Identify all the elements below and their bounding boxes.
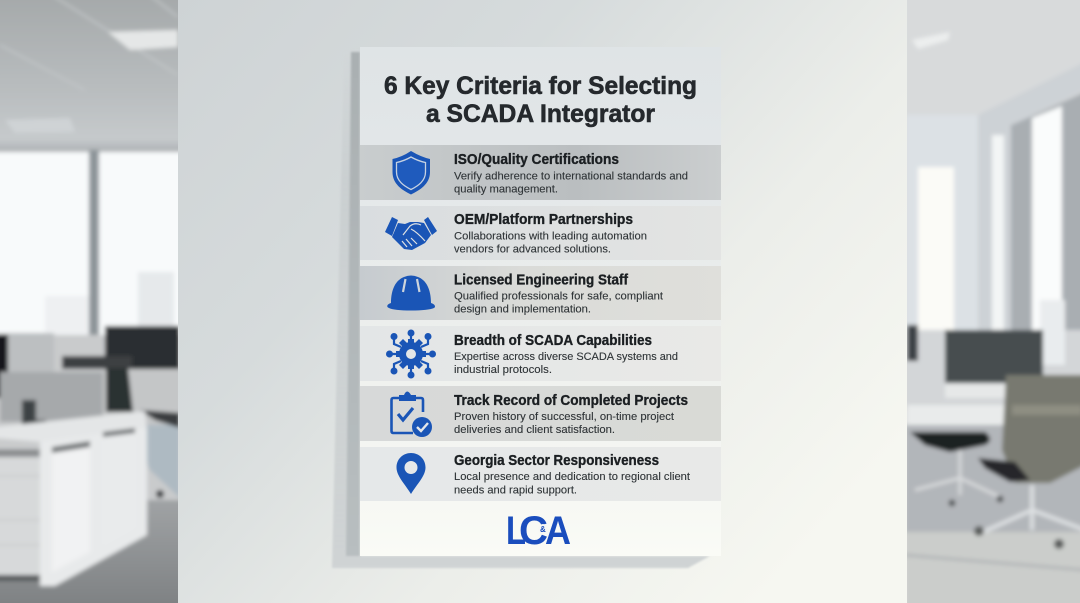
- text: Track Record of Completed Projects: Proven history of successful, on-time project: [454, 411, 674, 423]
- text: ISO/Quality Certifications: [454, 152, 688, 196]
- row: Georgia Sector Responsiveness: [360, 447, 721, 501]
- logo: LC&A: &: [540, 525, 546, 534]
- text: Breadth of SCADA Capabilities: [454, 333, 678, 376]
- text: Licensed Engineering Staff: Qualified professionals for safe, compliant: [454, 290, 663, 302]
- icon: gear network: [386, 330, 436, 378]
- icon: handshake: [385, 217, 437, 250]
- text: Georgia Sector Responsiveness: Local presence and dedication to regional client: [454, 471, 690, 483]
- text: OEM/Platform Partnerships: OEM/Platform Partnerships: [454, 212, 633, 228]
- wall: [178, 0, 907, 603]
- text: Breadth of SCADA Capabilities: industrial protocols.: [454, 364, 552, 376]
- text: Track Record of Completed Projects: [454, 393, 688, 436]
- row: Licensed Engineering Staff: [360, 266, 721, 320]
- title: a SCADA Integrator: [426, 100, 655, 128]
- background: office right side: [905, 0, 1080, 603]
- text: Georgia Sector Responsiveness: needs and rapid support.: [454, 484, 577, 496]
- text: Track Record of Completed Projects: Track Record of Completed Projects: [454, 393, 688, 409]
- row: Track Record of Completed Projects: [360, 386, 721, 441]
- infographic panel: [360, 47, 721, 556]
- text: Georgia Sector Responsiveness: Georgia Sector Responsiveness: [454, 453, 659, 469]
- row: Breadth of SCADA Capabilities: [360, 326, 721, 381]
- row: ISO/Quality Certifications: [360, 145, 721, 200]
- text: Licensed Engineering Staff: design and implementation.: [454, 304, 591, 316]
- text: Georgia Sector Responsiveness: [454, 453, 690, 496]
- text: OEM/Platform Partnerships: vendors for advanced solutions.: [454, 244, 611, 256]
- row: OEM/Platform Partnerships: [360, 206, 721, 260]
- text: Licensed Engineering Staff: Licensed Engineering Staff: [454, 272, 628, 288]
- logo: LC&A: [506, 509, 571, 553]
- text: OEM/Platform Partnerships: [454, 212, 647, 256]
- text: OEM/Platform Partnerships: Collaborations with leading automation: [454, 230, 647, 242]
- title: 6 Key Criteria for Selecting: [384, 72, 697, 100]
- title: [384, 72, 697, 128]
- icon: clipboard with check: [392, 392, 432, 437]
- logo: LC&A: L: [506, 509, 526, 553]
- icon: location pin: [396, 453, 426, 494]
- text: Licensed Engineering Staff: [454, 272, 663, 316]
- logo: LC&A: A: [545, 509, 571, 553]
- text: Breadth of SCADA Capabilities: Expertise across diverse SCADA systems and: [454, 351, 678, 363]
- text: ISO/Quality Certifications: quality management.: [454, 184, 558, 196]
- icon: shield: [392, 151, 430, 194]
- text: Breadth of SCADA Capabilities: Breadth of SCADA Capabilities: [454, 333, 652, 349]
- logo: LC&A: C: [519, 509, 548, 553]
- text: ISO/Quality Certifications: Verify adherence to international standards and: [454, 170, 688, 182]
- background: office left side: [0, 0, 185, 603]
- panel shadow: [332, 48, 710, 568]
- text: Track Record of Completed Projects: deliveries and client satisfaction.: [454, 424, 615, 436]
- text: ISO/Quality Certifications: ISO/Quality Certifications: [454, 152, 619, 168]
- icon: hard hat: [387, 276, 435, 310]
